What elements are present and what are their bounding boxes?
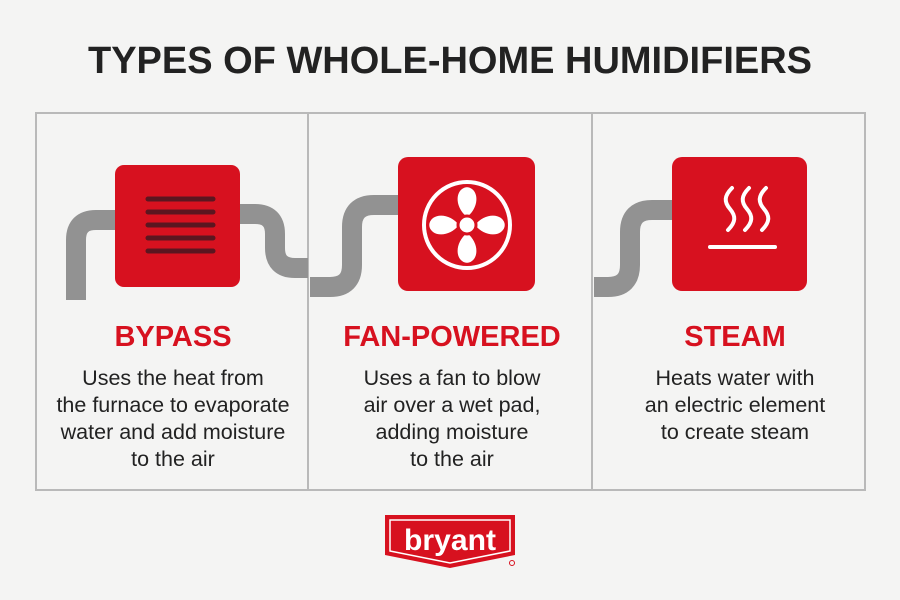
icon: fan <box>398 157 535 291</box>
text: bypass description: the furnace to evaporate <box>56 393 290 417</box>
title: TYPES OF WHOLE-HOME HUMIDIFIERS <box>88 40 812 82</box>
panel: bypass <box>56 165 290 471</box>
heading: bypass: BYPASS <box>114 321 232 353</box>
text: steam description: Heats water with <box>656 366 814 390</box>
icon: steam <box>672 157 807 291</box>
text: steam description: to create steam <box>661 420 809 444</box>
panel: fan-powered <box>343 157 561 471</box>
text: bypass description: Uses the heat from <box>82 366 264 390</box>
text: bypass description: water and add moisture <box>60 420 285 444</box>
heading: steam: STEAM <box>684 321 786 353</box>
text: steam description: an electric element <box>645 393 825 417</box>
text: fan-powered description: Uses a fan to blow <box>364 366 541 390</box>
text: bypass description: to the air <box>131 447 215 471</box>
logo: bryant: bryant <box>404 524 496 557</box>
panel frame <box>36 113 865 490</box>
text: fan-powered description: air over a wet pad, <box>364 393 540 417</box>
pipes <box>76 205 676 300</box>
text: fan-powered description: adding moisture <box>376 420 528 444</box>
logo: bryant <box>385 515 515 568</box>
icon: bypass vent <box>115 165 240 287</box>
heading: fan-powered: FAN-POWERED <box>343 321 561 353</box>
panel: steam <box>645 157 825 444</box>
text: fan-powered description: to the air <box>410 447 494 471</box>
